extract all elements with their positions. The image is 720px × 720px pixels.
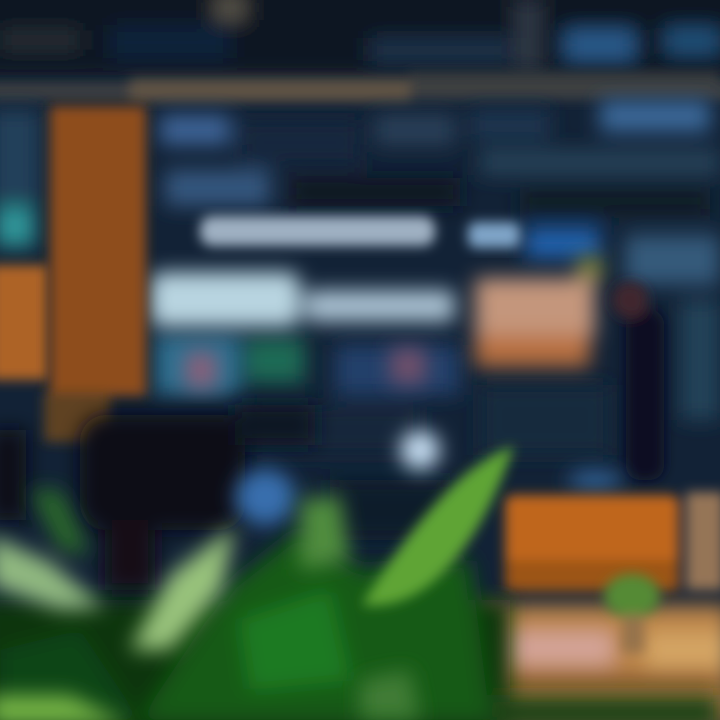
ceiling beam [0, 72, 720, 102]
wooden pillar [44, 106, 146, 442]
dark seating [0, 405, 315, 590]
plant leaves, foreground [0, 530, 720, 720]
orange sofa [505, 492, 720, 591]
blue wall panels [0, 100, 720, 540]
small red accents [185, 348, 426, 388]
ceiling area [0, 0, 720, 75]
blurred heading: light band [200, 216, 520, 248]
blurred subheading: light band [150, 272, 455, 327]
bright blue spots [235, 430, 623, 525]
wooden table [480, 605, 720, 720]
small potted plant [604, 574, 660, 653]
bright green leaf [362, 446, 514, 606]
left orange panel [0, 265, 48, 380]
pale leaf left [0, 490, 420, 720]
person silhouette [612, 282, 664, 480]
warm sign panel [475, 258, 602, 367]
